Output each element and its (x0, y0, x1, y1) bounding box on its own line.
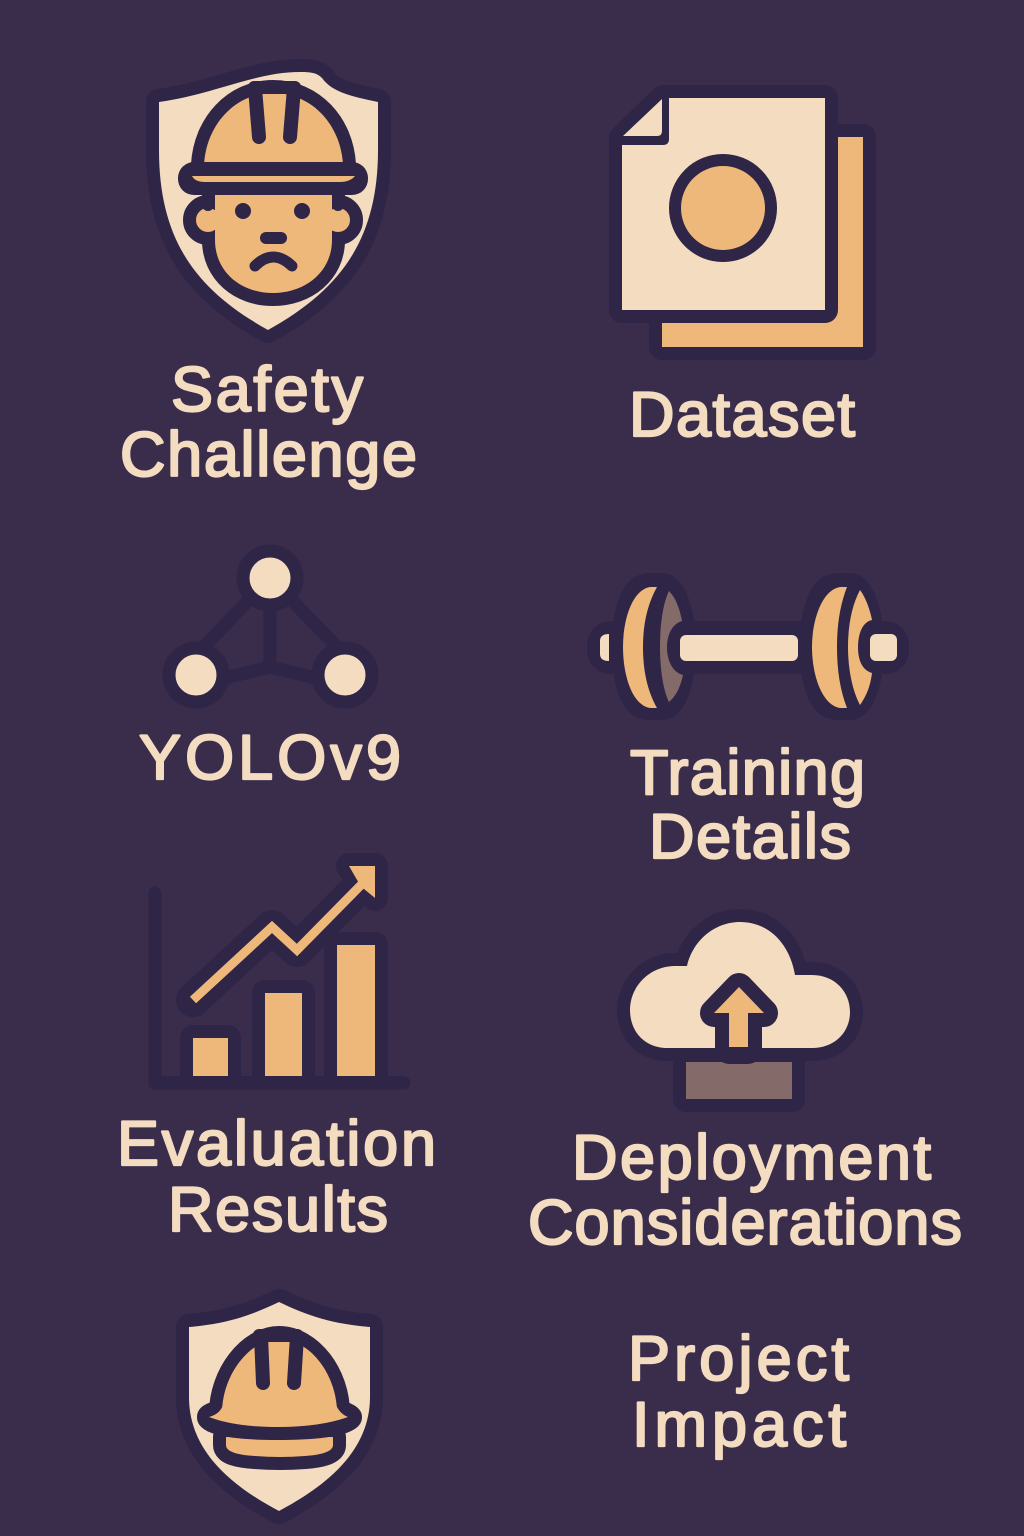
icon: stacked document with circle (622, 98, 863, 347)
panel: training details (587, 573, 909, 872)
panel: dataset (622, 98, 863, 450)
label: Safety Challenge: Safety (171, 355, 364, 425)
label: Project Impact: Impact (632, 1390, 846, 1460)
label: Deployment Considerations: Considerations (528, 1188, 962, 1258)
label: Safety Challenge: Challenge (120, 420, 417, 490)
label: Deployment Considerations: Deployment (572, 1123, 931, 1193)
icon: bar chart with rising arrow (155, 866, 404, 1089)
icon: shield with worker in hard hat (159, 72, 378, 330)
label: Training Details (630, 738, 865, 872)
label: Evaluation Results: Evaluation (117, 1109, 436, 1179)
icon: dumbbell (587, 573, 909, 720)
label: Deployment Considerations (528, 1123, 962, 1258)
panel: evaluation results (117, 866, 436, 1245)
label: YOLOv9: YOLOv9 (139, 723, 401, 793)
panel: project impact (189, 1302, 849, 1511)
label: Safety Challenge (120, 355, 417, 490)
label: Training Details: Training (630, 738, 865, 808)
label: Project Impact: Project (628, 1324, 849, 1394)
icon: cloud upload (630, 922, 850, 1099)
label: Evaluation Results: Results (168, 1175, 388, 1245)
label: Dataset: Dataset (629, 380, 855, 450)
panel: YOLOv9 (139, 551, 401, 793)
panel: safety challenge (120, 72, 417, 490)
icon: network of three nodes (169, 551, 372, 702)
label: Project Impact (628, 1324, 849, 1460)
label: Training Details: Details (649, 802, 851, 872)
panel: deployment considerations (528, 922, 962, 1258)
label: Evaluation Results (117, 1109, 436, 1245)
icon: shield with hard hat (189, 1302, 370, 1511)
